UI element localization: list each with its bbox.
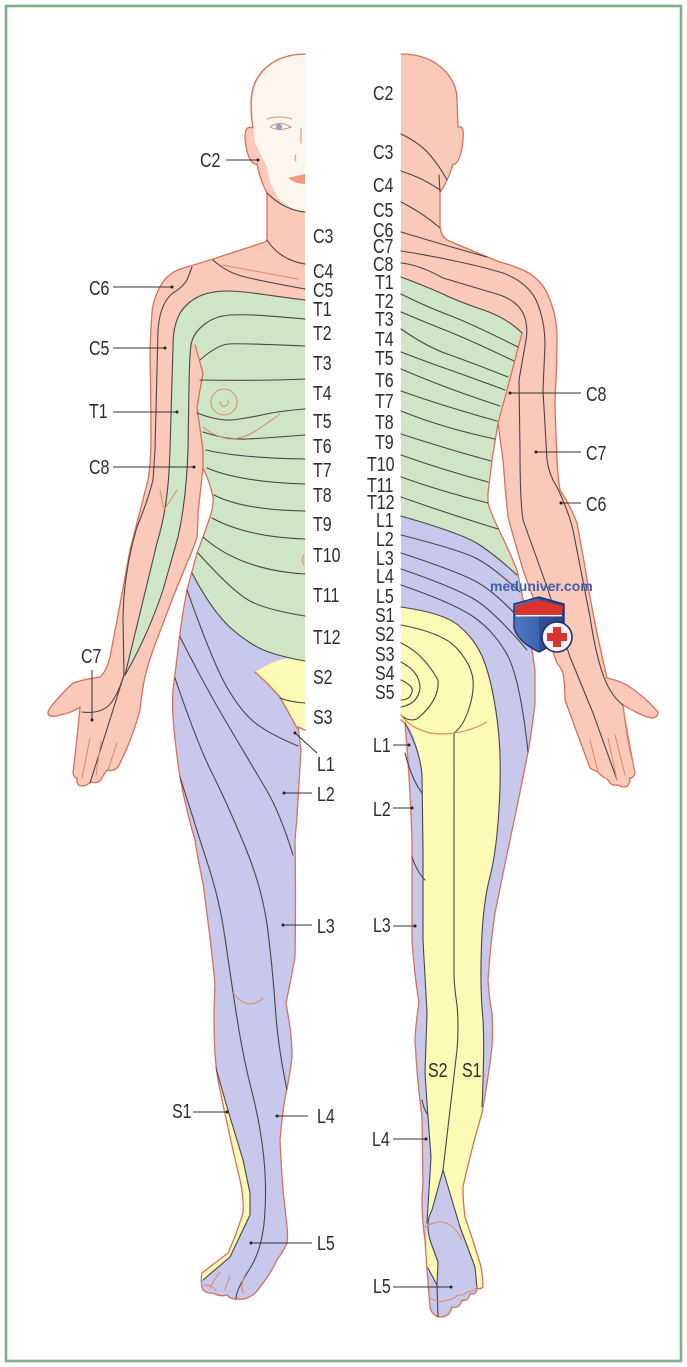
back dermatome lines (401, 134, 623, 1317)
label C7 front (81, 645, 101, 722)
label T3: T3 (313, 352, 332, 374)
body details: clavicle, breast, navel, knee, elbow, fingers, toes (82, 265, 304, 1293)
label T1 back: T1 (375, 271, 394, 293)
label L5 leg: L5 (373, 1275, 391, 1297)
label T2: T2 (313, 322, 332, 344)
label C7 back: C7 (373, 235, 393, 257)
label T6: T6 (313, 435, 332, 457)
label T10 back: T10 (367, 453, 395, 475)
labels front figure (81, 149, 341, 1254)
label L2 front: L2 (317, 783, 335, 805)
label L3 front: L3 (317, 915, 335, 937)
label C5: C5 (313, 279, 333, 301)
label L2 back: L2 (376, 528, 394, 550)
label C7 arm (534, 442, 606, 464)
region: purple foot wedge (428, 1172, 476, 1316)
label C6 arm (560, 493, 606, 515)
label C3 back: C3 (373, 141, 393, 163)
label C5 front: C5 (89, 337, 109, 359)
label C2 front (200, 149, 260, 171)
front figure (48, 54, 305, 1310)
label S5 back: S5 (375, 681, 395, 703)
label L3 leg: L3 (373, 914, 391, 936)
label C3: C3 (313, 225, 333, 247)
label T1 front (89, 400, 178, 422)
watermark text: meduniver.com (490, 578, 593, 594)
label L2 leg (373, 798, 414, 820)
back coloured regions (401, 277, 545, 1320)
label C8 arm (508, 383, 606, 405)
label L4 front (276, 1105, 335, 1127)
label S2 back: S2 (375, 623, 395, 645)
label C4 back: C4 (373, 174, 393, 196)
label C8 front: C8 (89, 456, 109, 478)
label T12: T12 (313, 626, 341, 648)
armpit edge (498, 333, 522, 423)
label L4 leg: L4 (372, 1128, 390, 1150)
label T9: T9 (313, 513, 332, 535)
label S1 front: S1 (172, 1100, 192, 1122)
region: yellow S2 S3 front (255, 658, 305, 730)
label L4 leg (372, 1128, 428, 1150)
label L5 front (250, 1232, 335, 1254)
facial features (267, 117, 305, 184)
label S4 back: S4 (375, 662, 395, 684)
label L1 front: L1 (317, 753, 335, 775)
label T11 back: T11 (367, 474, 393, 496)
back silhouette base: pink cervical zone (401, 54, 658, 1317)
label T8: T8 (313, 484, 332, 506)
label T5 back: T5 (375, 347, 394, 369)
label T11: T11 (313, 584, 339, 606)
label C7 arm: C7 (586, 442, 606, 464)
watermark shield icon (514, 597, 572, 652)
label L5 leg (373, 1275, 452, 1297)
label C8 front (89, 456, 196, 478)
region: purple lumbar back (401, 516, 534, 1250)
label T8 back: T8 (375, 411, 394, 433)
label C4: C4 (313, 260, 333, 282)
region: purple lumbar front (173, 574, 300, 1299)
label C5 front (89, 337, 166, 359)
label S1 leg: S1 (462, 1059, 482, 1081)
label C6 front (89, 277, 174, 299)
face: C2 cream zone (252, 55, 305, 212)
front coloured regions (125, 291, 305, 1310)
label C2 front: C2 (200, 149, 220, 171)
label T7: T7 (313, 459, 332, 481)
label S1 back: S1 (375, 604, 395, 626)
label L1 back: L1 (376, 509, 394, 531)
label L1 front (294, 732, 335, 775)
back outline (401, 54, 658, 1317)
label S2: S2 (313, 666, 333, 688)
label L3 leg (373, 914, 416, 936)
label S3: S3 (313, 706, 333, 728)
label S3 back: S3 (375, 643, 395, 665)
front dermatome lines (82, 193, 305, 1299)
label T2 back: T2 (375, 290, 394, 312)
label T4: T4 (313, 382, 332, 404)
label C8 arm: C8 (586, 383, 606, 405)
back details: gluteal fold, ankle, toes, fingers (401, 707, 635, 1302)
label L3 front (282, 915, 335, 937)
label T10: T10 (313, 544, 341, 566)
region: yellow sacral and leg back (401, 607, 500, 1320)
label T3 back: T3 (375, 308, 394, 330)
label L4 front: L4 (317, 1105, 335, 1127)
label T7 back: T7 (375, 390, 394, 412)
label T12 back: T12 (367, 491, 395, 513)
label L1 leg: L1 (373, 734, 391, 756)
label C2 back: C2 (373, 82, 393, 104)
label L3 back: L3 (376, 547, 394, 569)
labels back figure (367, 82, 606, 1297)
label C8 back: C8 (373, 253, 393, 275)
label L2 leg: L2 (373, 798, 391, 820)
label S2 leg: S2 (428, 1059, 448, 1081)
label C6 arm: C6 (586, 493, 606, 515)
label C7 front: C7 (81, 645, 101, 667)
region: green thoracic back (401, 277, 522, 575)
chest and arm inner edge (195, 345, 203, 468)
label S1 front (172, 1100, 228, 1122)
region: yellow S1 foot strip (202, 1078, 250, 1280)
label L4 back: L4 (376, 565, 394, 587)
label T9 back: T9 (375, 431, 394, 453)
label L5 back: L5 (376, 585, 394, 607)
lower edge of yellow sacral zone (255, 672, 297, 728)
label L1 leg (373, 734, 410, 756)
label T6 back: T6 (375, 369, 394, 391)
label T4 back: T4 (375, 328, 394, 350)
label T5: T5 (313, 410, 332, 432)
label C6 front: C6 (89, 277, 109, 299)
label L5 front: L5 (317, 1232, 335, 1254)
front silhouette base: pink cervical zone (48, 54, 305, 1299)
back figure (401, 54, 658, 1320)
label C5 back: C5 (373, 199, 393, 221)
front outline (48, 54, 305, 1299)
label C6 back: C6 (373, 219, 393, 241)
region: green thoracic front (125, 291, 305, 675)
label T1 front: T1 (89, 400, 108, 422)
label L2 front (282, 783, 335, 805)
label T1: T1 (313, 298, 332, 320)
